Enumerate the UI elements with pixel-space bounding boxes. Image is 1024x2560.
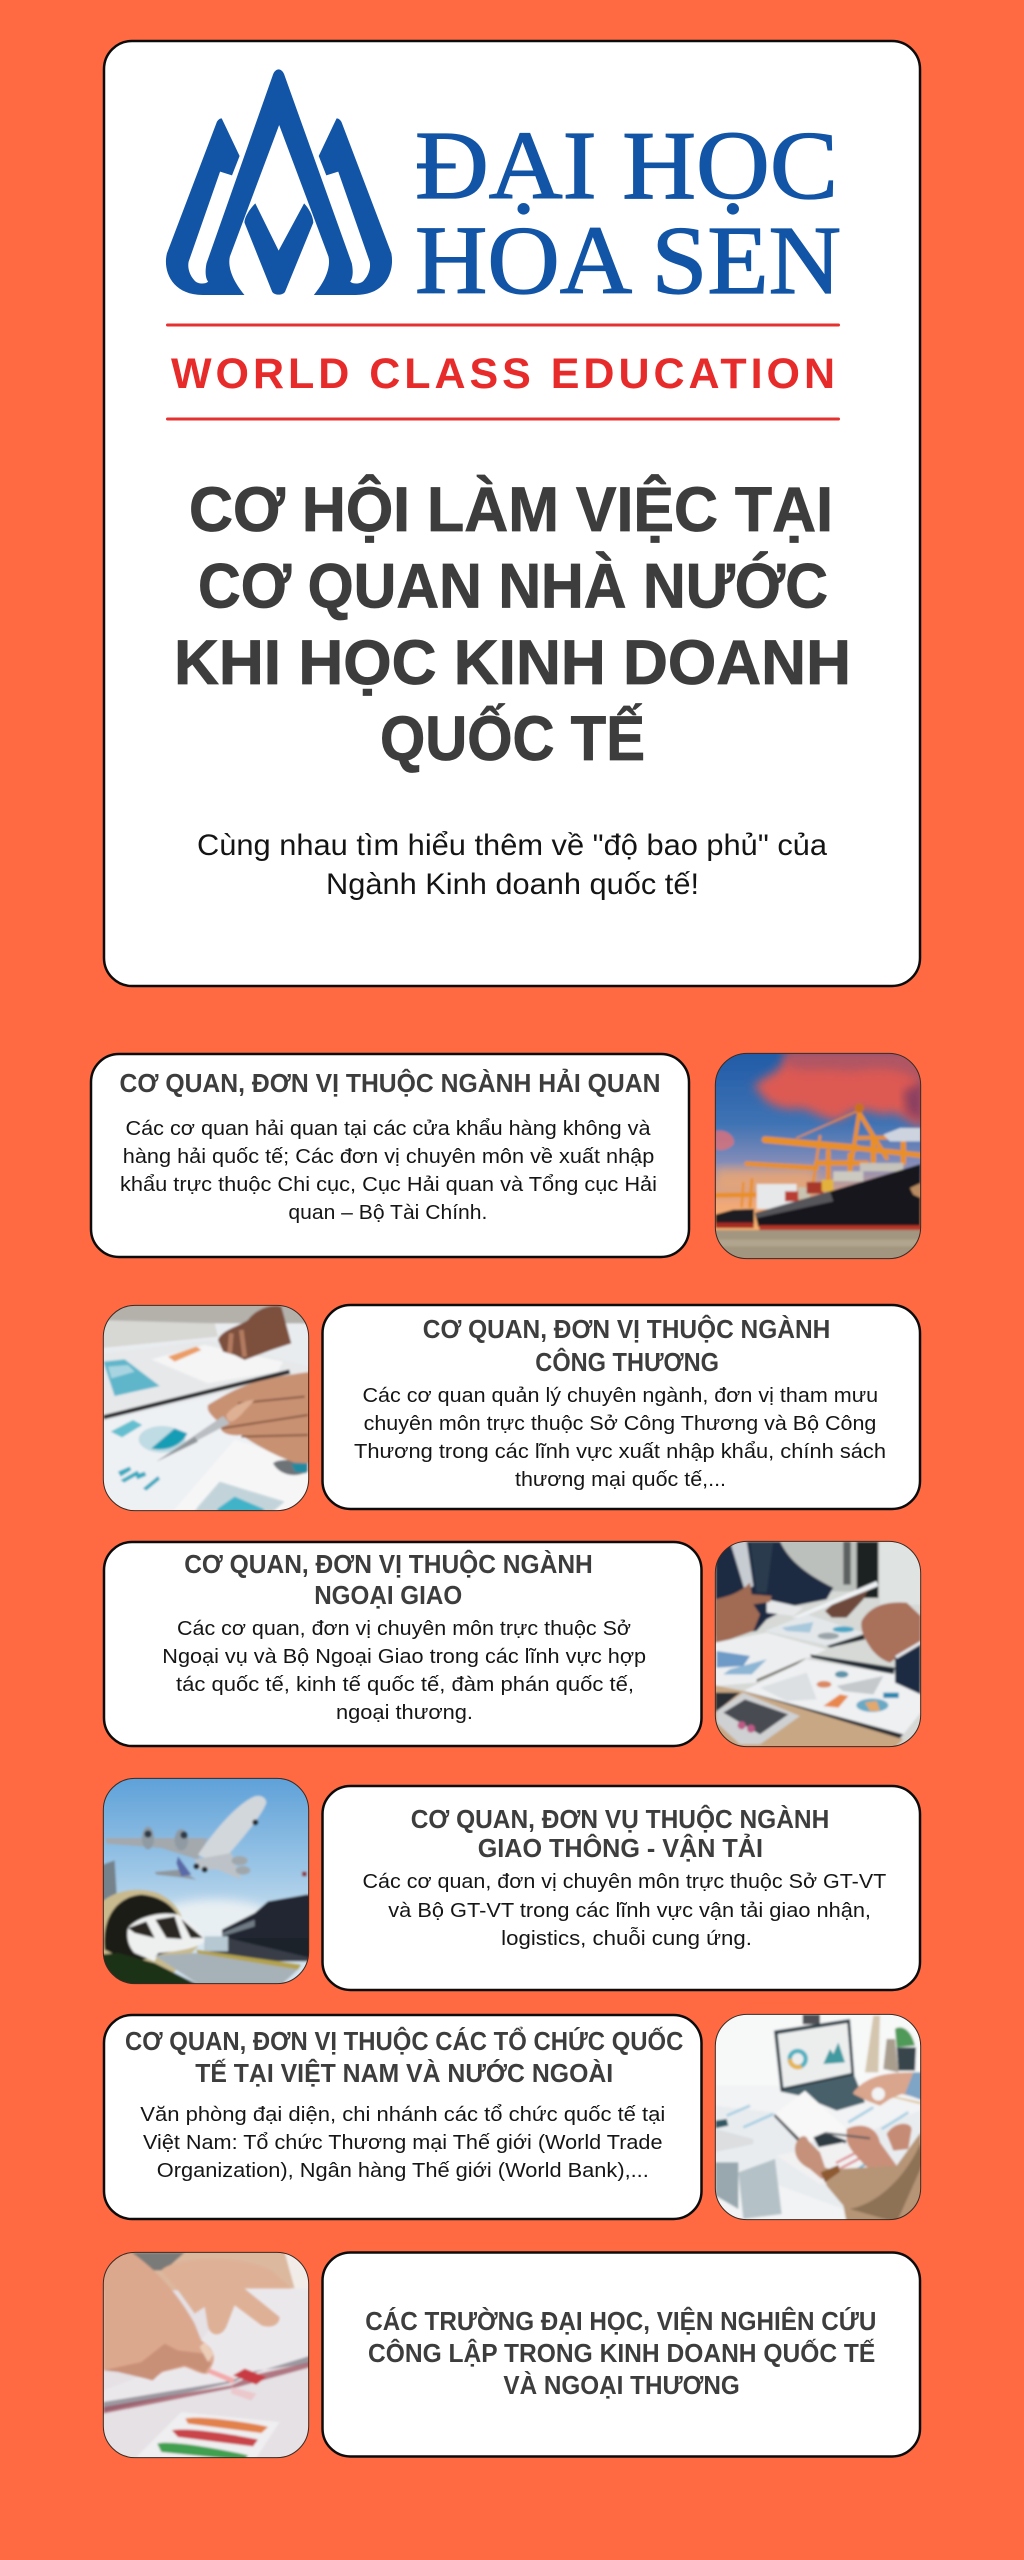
heading: transport: CƠ QUAN, ĐƠN VỤ THUỘC NGÀNH [411, 1804, 829, 1834]
text block: customs: khẩu trực thuộc Chi cục, Cục Hải quan và Tổng cục Hải [120, 1174, 657, 1196]
title: CƠ HỘI LÀM VIỆC TẠI [189, 474, 833, 545]
logo bottom rule [166, 418, 840, 420]
panel: public universities and research institutes [322, 2252, 920, 2456]
subtitle: Ngành Kinh doanh quốc tế! [326, 868, 699, 901]
panel: hero card [104, 41, 920, 986]
text block: customs: Các cơ quan hải quan tại các cửa khẩu hàng không và [126, 1118, 651, 1140]
panel: international organizations [104, 2015, 702, 2219]
text block: trade: Các cơ quan quản lý chuyên ngành, đơn vị tham mưu [362, 1385, 878, 1407]
text block: foreign affairs [162, 1618, 646, 1724]
title [174, 474, 851, 774]
text block: customs: quan – Bộ Tài Chính. [288, 1202, 487, 1224]
text block: transport [362, 1871, 886, 1950]
heading: foreign affairs: CƠ QUAN, ĐƠN VỊ THUỘC NGÀNH [184, 1549, 593, 1579]
text block: transport: và Bộ GT-VT trong các lĩnh vực vận tải giao nhận, [388, 1900, 871, 1922]
text block: international organizations: Organization), Ngân hàng Thế giới (World Bank),... [157, 2160, 649, 2182]
text block: transport: logistics, chuỗi cung ứng. [501, 1927, 752, 1950]
heading: universities: CÁC TRƯỜNG ĐẠI HỌC, VIỆN NGHIÊN CỨU [365, 2306, 876, 2336]
logo wordmark line 1: ĐẠI HỌC [415, 112, 838, 220]
text block: transport: Các cơ quan, đơn vị chuyên môn trực thuộc Sở GT-VT [362, 1871, 886, 1893]
text block: international organizations: Văn phòng đại diện, chi nhánh các tổ chức quốc tế tại [140, 2104, 665, 2126]
subtitle [197, 829, 827, 901]
panel: transport agencies [322, 1786, 920, 1990]
text block: foreign affairs: tác quốc tế, kinh tế quốc tế, đàm phán quốc tế, [176, 1674, 634, 1696]
photo: business meeting with documents [710, 1536, 926, 1752]
text block: trade: thương mại quốc tế,... [515, 1469, 726, 1491]
text block: trade [354, 1385, 886, 1491]
heading: universities [365, 2306, 876, 2400]
text block: foreign affairs: ngoại thương. [336, 1702, 473, 1724]
text block: foreign affairs: Các cơ quan, đơn vị chuyên môn trực thuộc Sở [177, 1618, 631, 1640]
title: QUỐC TẾ [380, 703, 645, 774]
heading: trade: CÔNG THƯƠNG [535, 1347, 719, 1377]
heading: transport [411, 1804, 829, 1863]
text block: trade: Thương trong các lĩnh vực xuất nhập khẩu, chính sách [354, 1441, 886, 1463]
heading: trade: CƠ QUAN, ĐƠN VỊ THUỘC NGÀNH [423, 1314, 830, 1344]
heading: universities: VÀ NGOẠI THƯƠNG [503, 2370, 740, 2400]
photo: hand with pen over financial charts [98, 1300, 314, 1516]
photo: container ship at port [710, 1048, 926, 1264]
heading: foreign affairs: NGOẠI GIAO [314, 1580, 462, 1610]
panel: foreign affairs agencies [104, 1542, 702, 1746]
logo top rule [166, 324, 840, 326]
heading: international organizations: CƠ QUAN, ĐƠN VỊ THUỘC CÁC TỔ CHỨC QUỐC [125, 2026, 684, 2056]
photo: plane, train and ship [98, 1773, 315, 1990]
heading: international organizations: TẾ TẠI VIỆT NAM VÀ NƯỚC NGOÀI [195, 2058, 613, 2088]
text block: foreign affairs: Ngoại vụ và Bộ Ngoại Giao trong các lĩnh vực hợp [162, 1646, 646, 1668]
heading: transport: GIAO THÔNG - VẬN TẢI [478, 1833, 763, 1863]
icon: lotus mountain emblem [166, 69, 392, 295]
logo wordmark line 2: HOA SEN [415, 207, 841, 314]
logo tagline: WORLD CLASS EDUCATION [171, 350, 835, 398]
panel: customs agencies [91, 1054, 689, 1257]
text block: international organizations [140, 2104, 665, 2182]
photo: team reviewing laptop dashboard [710, 2009, 926, 2225]
text block: customs [120, 1118, 657, 1224]
heading: universities: CÔNG LẬP TRONG KINH DOANH QUỐC TẾ [368, 2338, 875, 2368]
subtitle: Cùng nhau tìm hiểu thêm về "độ bao phủ" của [197, 829, 827, 862]
panel: trade agencies [322, 1305, 920, 1509]
logo: Dai hoc Hoa Sen [166, 69, 841, 420]
title: CƠ QUAN NHÀ NƯỚC [198, 552, 828, 622]
text block: customs: hàng hải quốc tế; Các đơn vị chuyên môn về xuất nhập [123, 1146, 654, 1168]
title: KHI HỌC KINH DOANH [174, 628, 851, 698]
text block: international organizations: Việt Nam: Tổ chức Thương mại Thế giới (World Trade [143, 2132, 662, 2154]
heading: international organizations [125, 2026, 684, 2088]
heading: foreign affairs [184, 1549, 593, 1610]
text block: trade: chuyên môn trực thuộc Sở Công Thương và Bộ Công [364, 1413, 876, 1435]
heading: customs: CƠ QUAN, ĐƠN VỊ THUỘC NGÀNH HẢI QUAN [120, 1068, 660, 1098]
heading: trade [423, 1314, 830, 1377]
photo: hands placing sticky tabs in notebook [98, 2247, 314, 2463]
